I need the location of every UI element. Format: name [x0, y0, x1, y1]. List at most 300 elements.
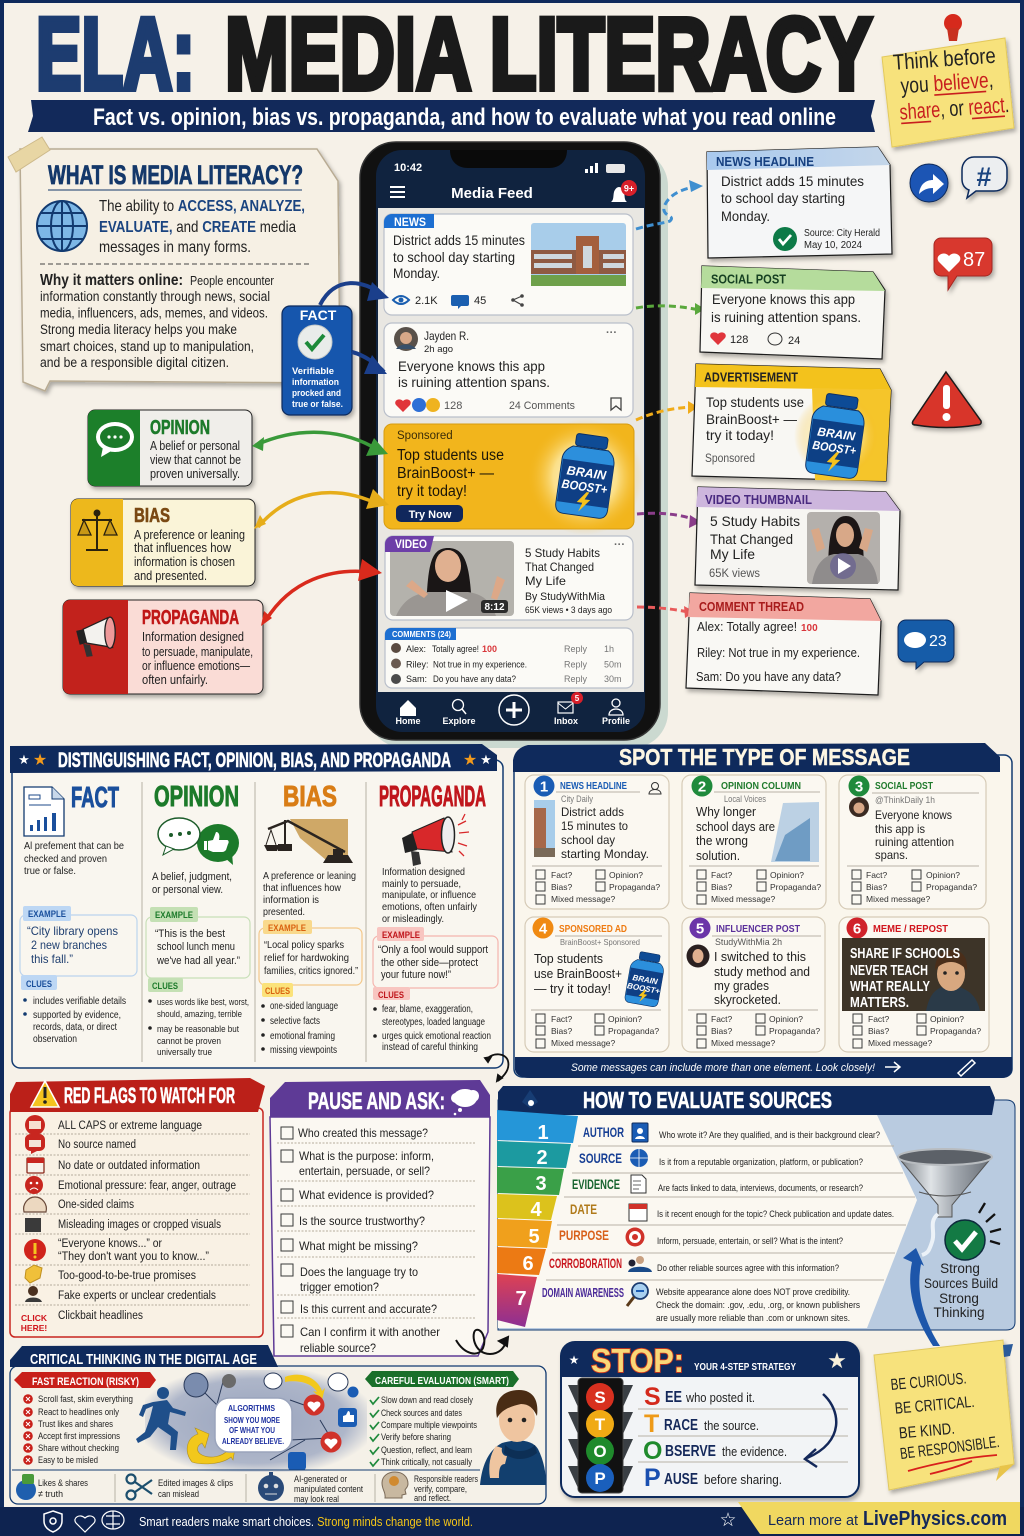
comments card: Sam:: [406, 674, 427, 684]
right card: news headline: Monday.: [721, 208, 770, 224]
comments card: [385, 628, 633, 688]
funnel steps: 4: [530, 1199, 542, 1221]
column: fact: includes verifiable details: [33, 996, 126, 1007]
criteria labels: AUTHOR: [583, 1124, 624, 1140]
card 6: Propaganda?: [930, 1026, 981, 1036]
criteria descriptions: Is it from a reputable organization, platform, or publication?: [659, 1157, 863, 1168]
card 5: Bias?: [711, 1026, 733, 1036]
criteria labels: EVIDENCE: [572, 1176, 620, 1192]
misconception: ai content: may look real: [294, 1494, 339, 1504]
steps: AUSE: [664, 1471, 698, 1488]
traffic light: [568, 1378, 633, 1493]
misconception: responsible readers: Responsible readers: [414, 1474, 478, 1484]
social post card: Jayden R.: [424, 329, 469, 343]
misconception: responsible readers: verify, compare,: [414, 1484, 467, 1494]
column: propaganda: [373, 781, 498, 1053]
runner: [136, 1387, 186, 1450]
reactions: 24 Comments: [509, 400, 575, 412]
card 6: 6: [853, 920, 861, 938]
flag list: “They don't want you to know...”: [58, 1251, 209, 1263]
title: ELA:: [36, 0, 195, 111]
reactions: [395, 398, 621, 412]
news card: to school day starting: [393, 249, 515, 265]
column: opinion: or personal view.: [152, 884, 223, 896]
arrow: opinion to ad: [252, 432, 388, 456]
misconception: edited images: Edited images & clips: [158, 1478, 233, 1489]
right card: video thumbnail: 5 Study Habits: [710, 513, 800, 529]
panel: distinguishing: ★: [480, 752, 492, 767]
careful evaluation list: Check sources and dates: [381, 1408, 462, 1419]
card 1: Mixed message?: [551, 894, 616, 904]
funnel caption: Strong: [939, 1291, 979, 1306]
panel: critical thinking: [10, 1345, 546, 1504]
panel: pause and ask: [270, 1080, 490, 1356]
comments card: Not true in my experience.: [433, 660, 527, 670]
column: bias: BIAS: [283, 781, 337, 813]
bottom navigation: [395, 692, 630, 726]
card 2: Bias?: [711, 882, 733, 892]
misconception: ai content: manipulated content: [294, 1484, 363, 1494]
icon: bottle: BRAIN: [632, 973, 659, 986]
column: fact: EXAMPLE: [28, 909, 66, 920]
card 2: Mixed message?: [711, 894, 776, 904]
fast reaction list: Trust likes and shares: [38, 1419, 113, 1430]
post stats: 45: [474, 295, 486, 307]
steps: T: [644, 1410, 659, 1438]
right card: news headline: [707, 147, 892, 258]
funnel caption: Sources Build: [924, 1276, 998, 1291]
fast reaction list: Accept first impressions: [38, 1431, 120, 1442]
right card: advertisement: [692, 364, 891, 481]
reactions: 128: [444, 400, 462, 412]
card 1: District adds: [561, 805, 624, 819]
column: fact: CLUES: [26, 979, 52, 990]
steps: the evidence.: [722, 1444, 787, 1459]
right card: social post: 128: [730, 334, 748, 346]
panel: distinguishing: ★: [463, 752, 477, 769]
criteria labels: SOURCE: [579, 1150, 622, 1166]
card 3: Fact?: [866, 870, 888, 880]
cloud: algorithms: ALREADY BELIEVE.: [222, 1436, 284, 1446]
funnel steps: [497, 1110, 578, 1327]
icon: warning: [912, 372, 981, 428]
propaganda box: or influence emotions—: [142, 659, 250, 673]
comments card: COMMENTS (24): [392, 629, 451, 639]
funnel steps: 5: [528, 1226, 540, 1248]
boy thinking: [480, 1390, 546, 1485]
careful evaluation list: Compare multiple viewpoints: [381, 1420, 477, 1431]
opinion box: OPINION: [150, 417, 210, 439]
column: opinion: A belief, judgment,: [152, 871, 232, 883]
right card: advertisement: BrainBoost+ —: [706, 411, 797, 427]
right card: video thumbnail: My Life: [710, 546, 755, 562]
propaganda box: often unfairly.: [142, 673, 208, 687]
blue arrow to funnel: [903, 1248, 940, 1346]
cloud: algorithms: SHOW YOU MORE: [224, 1415, 280, 1425]
right card: social post: [700, 266, 885, 359]
column: propaganda: emotions, often unfairly: [382, 901, 478, 913]
card 4: 4: [539, 920, 548, 938]
footer note: Some messages can include more than one element. Look closely!: [571, 1062, 875, 1074]
careful evaluation list: Verify before sharing: [381, 1432, 451, 1443]
social post card: Everyone knows this app: [398, 358, 545, 374]
icon: hashtag bubble: #: [976, 162, 992, 192]
video card: 5 Study Habits: [525, 546, 600, 560]
icon: bottle: [624, 950, 666, 1008]
flag list: No source named: [58, 1139, 136, 1151]
column: fact: checked and proven: [24, 853, 107, 865]
app bar: Media Feed: [451, 185, 533, 202]
checklist: [281, 1126, 440, 1355]
sponsored ad card: Top students use: [397, 447, 504, 464]
criteria descriptions: Check the domain: .gov, .edu, .org, or known publishers: [656, 1300, 860, 1311]
card 4: BrainBoost+ Sponsored: [560, 937, 640, 947]
column: bias: presented.: [263, 906, 305, 918]
criteria descriptions: Is it recent enough for the topic? Check publication and update dates.: [657, 1209, 894, 1220]
bias box: that influences how: [134, 541, 232, 555]
card 6: [839, 917, 989, 1052]
cloud: algorithms: [215, 1398, 292, 1452]
link tag: LivePhysics.com: [863, 1508, 1007, 1530]
card 5: my grades: [714, 979, 769, 993]
bias box: and presented.: [134, 569, 207, 583]
app bar: [390, 180, 637, 202]
right card: news headline: May 10, 2024: [804, 240, 862, 251]
right card: video thumbnail: VIDEO THUMBNAIL: [705, 493, 812, 507]
column: propaganda: mainly to persuade,: [382, 878, 461, 890]
connector arrowheads: [684, 180, 705, 618]
funnel steps: 1: [537, 1122, 549, 1144]
card 3: Opinion?: [926, 870, 960, 880]
sticky note: think before: you believe,: [900, 67, 994, 98]
flag list: ALL CAPS or extreme language: [58, 1120, 202, 1132]
card 4: Mixed message?: [551, 1038, 616, 1048]
card 1: Bias?: [551, 882, 573, 892]
arrow: curved: [805, 1394, 836, 1467]
icon: thought cloud: [451, 1089, 479, 1115]
panel: red flags: [10, 1078, 265, 1337]
why it matters: [40, 272, 274, 370]
right card: news headline: NEWS HEADLINE: [716, 155, 814, 169]
card 1: starting Monday.: [561, 847, 649, 861]
fast reaction list: React to headlines only: [38, 1407, 119, 1418]
card 3: [839, 775, 986, 909]
icon: red megaphone: [402, 814, 469, 866]
funnel caption: Strong: [940, 1261, 980, 1276]
right card: comment thread: Alex: Totally agree!: [697, 620, 797, 634]
column: propaganda: Information designed: [382, 866, 465, 878]
callout: fact: true or false.: [292, 399, 343, 410]
card 6: Opinion?: [930, 1014, 964, 1024]
column: opinion: EXAMPLE: [155, 910, 193, 921]
column: bias: relief for hardwoking: [264, 952, 349, 964]
card 1: City Daily: [561, 794, 593, 805]
definition: messages in many forms.: [99, 239, 251, 256]
why it matters: People encounter: [190, 274, 274, 288]
card 2: OPINION COLUMN: [721, 781, 801, 792]
card 5: StudyWithMia 2h: [715, 937, 782, 947]
heading: WHAT IS MEDIA LITERACY?: [48, 160, 303, 190]
fast reaction list: FAST REACTION (RISKY): [32, 1376, 139, 1388]
column: propaganda: “Only a fool would support: [378, 944, 488, 956]
card 4: [525, 917, 669, 1052]
heading: RED FLAGS TO WATCH FOR: [64, 1083, 235, 1108]
criteria icons: [626, 1123, 652, 1306]
column: opinion: CLUES: [152, 981, 178, 992]
tagline: Smart readers make smart choices. Strong minds change the world.: [139, 1515, 473, 1529]
thumbnail image: [807, 512, 880, 584]
checklist: What might be missing?: [299, 1239, 418, 1253]
card 4: — try it today!: [534, 982, 611, 996]
heading: STOP:: [591, 1342, 684, 1379]
sponsored ad card: Try Now: [409, 509, 452, 521]
card 2: 2: [698, 778, 706, 796]
opinion box: [88, 410, 252, 486]
careful evaluation list: CAREFUL EVALUATION (SMART): [375, 1375, 509, 1387]
definition: The ability to ACCESS, ANALYZE,: [99, 198, 305, 215]
icon: warning: [31, 1081, 59, 1107]
steps: EE: [665, 1389, 682, 1406]
bottom navigation: Home: [395, 716, 421, 726]
card 5: study method and: [714, 965, 810, 979]
card 5: Opinion?: [769, 1014, 803, 1024]
column: opinion: “This is the best: [155, 928, 225, 940]
fast reaction list: Share without checking: [38, 1443, 119, 1454]
checklist: Who created this message?: [298, 1126, 428, 1140]
criteria labels: PURPOSE: [559, 1227, 609, 1243]
bias box: A preference or leaning: [134, 528, 245, 542]
flag list: No date or outdated information: [58, 1160, 200, 1172]
card 2: [682, 775, 826, 909]
criteria descriptions: Inform, persuade, entertain, or sell? What is the intent?: [657, 1236, 843, 1247]
column: opinion: universally true: [157, 1047, 212, 1058]
icon: bottle: BRAIN: [816, 424, 856, 444]
arrow: squiggle: [456, 1330, 508, 1354]
video card: That Changed: [525, 560, 594, 574]
misconception: likes: [16, 1474, 88, 1500]
icon: shield: [44, 1511, 62, 1532]
criteria labels: DOMAIN AWARENESS: [542, 1285, 624, 1300]
column: bias: one-sided language: [270, 1001, 338, 1012]
misconception: responsible readers: and reflect.: [414, 1493, 451, 1503]
right card: video thumbnail: That Changed: [710, 531, 793, 547]
bottom navigation: Profile: [602, 716, 630, 726]
social post card: is ruining attention spans.: [398, 374, 550, 390]
right card: advertisement: Top students use: [706, 394, 804, 410]
funnel caption: Thinking: [933, 1305, 985, 1320]
video thumbnail: 8:12: [484, 602, 505, 613]
misconception: likes: Likes & shares: [38, 1478, 88, 1489]
meme image: NEVER TEACH: [850, 962, 928, 979]
right card: comment thread: COMMENT THREAD: [699, 600, 804, 614]
link tag: [738, 1502, 1020, 1534]
sticky note: be curious: BE CRITICAL.: [894, 1394, 975, 1418]
card 3: this app is: [875, 822, 925, 836]
card 2: Opinion?: [770, 870, 804, 880]
column: bias: selective facts: [270, 1016, 320, 1027]
icon: share: [910, 164, 948, 202]
meme image: [842, 938, 985, 1011]
post stats: 2.1K: [415, 295, 438, 307]
comments card: Reply: [564, 644, 588, 654]
why it matters: Why it matters online:: [40, 272, 183, 289]
column: propaganda: instead of careful thinking: [382, 1042, 478, 1053]
card 2: school days are: [696, 820, 775, 834]
sticky note: think before: [882, 14, 1014, 147]
panel: how to evaluate sources: [497, 1086, 1015, 1330]
card 4: Propaganda?: [608, 1026, 659, 1036]
sticky note: think before: share, or react.: [899, 92, 1010, 125]
column: bias: A preference or leaning: [263, 870, 356, 882]
heading: PAUSE AND ASK:: [308, 1088, 445, 1115]
icon: bottle: BOOST+: [561, 477, 609, 497]
why it matters: and be a responsible digital citizen.: [40, 355, 229, 370]
steps: P: [644, 1464, 661, 1492]
propaganda box: to persuade, manipulate,: [142, 645, 253, 659]
panel: what is media literacy: [8, 137, 340, 391]
app bar: 9+: [624, 184, 634, 194]
criteria descriptions: Who wrote it? Are they qualified, and is their background clear?: [659, 1130, 880, 1141]
image: school building: [531, 223, 626, 286]
careful evaluation list: Think critically, not casually: [381, 1457, 472, 1468]
card 2: Local Voices: [724, 794, 766, 805]
criteria descriptions: Website appearance alone does NOT prove credibility.: [656, 1287, 850, 1298]
card 4: Fact?: [551, 1014, 573, 1024]
heading: CRITICAL THINKING IN THE DIGITAL AGE: [30, 1351, 257, 1368]
right card: video thumbnail: 65K views: [709, 568, 760, 580]
sticky note: be curious: BE CURIOUS.: [890, 1370, 967, 1394]
card 1: 1: [540, 778, 548, 796]
footer note: [515, 1057, 1012, 1078]
column: fact: “City library opens: [27, 924, 118, 938]
bias box: information is chosen: [134, 555, 235, 569]
card 4: use BrainBoost+: [534, 967, 622, 981]
card 5: [682, 917, 825, 1052]
right card: news headline: to school day starting: [721, 190, 845, 206]
icon: opinion bubbles: [158, 818, 239, 865]
icon: speech bubble: [96, 422, 134, 457]
sponsored ad card: BrainBoost+ —: [397, 465, 494, 482]
card 1: 15 minutes to: [561, 819, 628, 833]
right card: comment thread: 100: [801, 623, 818, 634]
why it matters: Strong media literacy helps you make: [40, 322, 237, 337]
why it matters: information constantly through news, social: [40, 289, 270, 304]
callout: fact: [282, 306, 352, 415]
column: fact: records, data, or direct: [33, 1022, 117, 1033]
column: propaganda: PROPAGANDA: [379, 781, 486, 813]
news card: Monday.: [393, 265, 440, 281]
propaganda box: [63, 600, 263, 694]
icon: tilted scale: [264, 819, 353, 863]
checklist: What is the purpose: inform,: [299, 1149, 434, 1163]
checklist: Is the source trustworthy?: [299, 1214, 425, 1228]
column: bias: that influences how: [263, 882, 341, 894]
callout: fact: Verifiable: [292, 366, 334, 377]
why it matters: smart choices, stand up to manipulation,: [40, 339, 254, 354]
misconception: edited images: [126, 1474, 233, 1500]
card 3: ruining attention: [875, 835, 954, 849]
panel: distinguishing: ★: [18, 752, 30, 767]
right card: comment thread: Riley: Not true in my experience.: [697, 646, 860, 660]
misconception: edited images: can mislead: [158, 1489, 199, 1500]
comments card: Alex:: [406, 644, 426, 654]
panel: stop strategy: YOUR 4-STEP STRATEGY: [694, 1361, 796, 1373]
footer: ☆: [719, 1510, 737, 1531]
column: bias: missing viewpoints: [270, 1045, 337, 1056]
cloud: algorithms: OF WHAT YOU: [229, 1425, 275, 1435]
opinion box: view that cannot be: [150, 453, 241, 467]
opinion box: proven universally.: [150, 467, 240, 481]
arrow: fact to news: [320, 282, 389, 374]
card 4: Bias?: [551, 1026, 573, 1036]
column: propaganda: CLUES: [378, 990, 404, 1001]
column: opinion: [146, 781, 250, 1058]
panel: stop strategy: [561, 1342, 859, 1497]
card 5: skyrocketed.: [714, 993, 781, 1007]
opinion box: A belief or personal: [150, 439, 240, 453]
flag list: Misleading images or cropped visuals: [58, 1219, 221, 1231]
icon: scales: [78, 510, 117, 550]
right card: video thumbnail: [695, 487, 900, 590]
subtitle banner: [28, 100, 875, 132]
right card: advertisement: try it today!: [706, 427, 774, 443]
card 1: NEWS HEADLINE: [560, 781, 627, 792]
flag list: Emotional pressure: fear, anger, outrage: [58, 1180, 236, 1192]
column: fact: supported by evidence,: [33, 1010, 121, 1021]
criteria descriptions: are usually more reliable than .com or unknown sites.: [656, 1313, 850, 1324]
funnel graphic: [898, 1149, 992, 1255]
column: bias: information is: [263, 894, 319, 906]
card 3: spans.: [875, 848, 908, 862]
video card: ···: [614, 539, 625, 551]
callout: fact: information: [292, 377, 339, 388]
card 1: school day: [561, 833, 615, 847]
meme image: WHAT REALLY: [850, 978, 930, 995]
dashed connectors to right cards: [636, 187, 700, 612]
check badge: [945, 1203, 1001, 1260]
column: opinion: may be reasonable but: [157, 1024, 239, 1035]
video thumbnail: [390, 541, 514, 616]
badge: likes: 87: [963, 249, 985, 271]
criteria labels: [542, 1124, 624, 1300]
checklist: trigger emotion?: [300, 1280, 379, 1294]
steps: O: [643, 1437, 662, 1465]
icon: bottle: BOOST+: [626, 981, 661, 996]
column: bias: emotional framing: [270, 1031, 335, 1042]
criteria labels: CORROBORATION: [549, 1255, 622, 1271]
flag list: [58, 1120, 236, 1322]
funnel steps: 3: [535, 1173, 547, 1195]
card 2: Fact?: [711, 870, 733, 880]
traffic light: P: [594, 1469, 606, 1488]
right card: advertisement: ADVERTISEMENT: [704, 370, 798, 384]
flag list: Too-good-to-be-true promises: [58, 1270, 196, 1282]
steps: the source.: [704, 1418, 759, 1433]
column: propaganda: stereotypes, loaded language: [382, 1017, 485, 1028]
card 1: Opinion?: [609, 870, 643, 880]
link tag: Learn more at: [768, 1512, 859, 1529]
careful evaluation list: Slow down and read closely: [381, 1395, 473, 1406]
card 3: 3: [855, 778, 863, 796]
bottom navigation: 5: [575, 694, 580, 703]
post stats: [393, 294, 524, 309]
column: bias: EXAMPLE: [268, 923, 306, 934]
definition: [99, 198, 305, 256]
arrow: propaganda to video: [261, 559, 382, 626]
callout: fact: procked and: [292, 388, 341, 399]
status bar: [394, 162, 625, 174]
misconception: ai content: [258, 1472, 363, 1504]
